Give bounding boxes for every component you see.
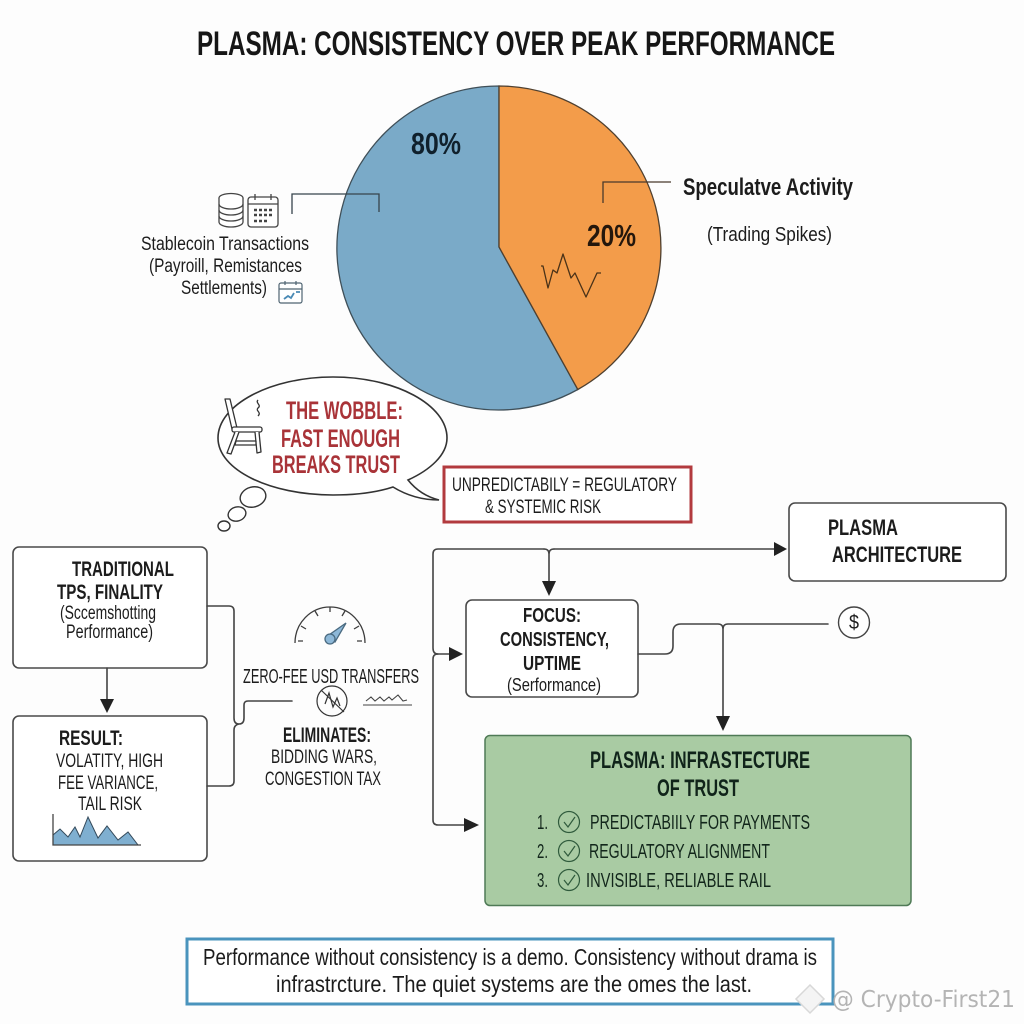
- icon: spike line: [541, 254, 601, 297]
- list item 2: 2.: [537, 841, 548, 863]
- text: stablecoin label: [141, 234, 309, 299]
- text: stablecoin label: Settlements): [181, 278, 267, 299]
- value: 80%: 80%: [411, 126, 461, 161]
- panel: result: TAIL RISK: [78, 794, 142, 815]
- speech bubble: the wobble: [218, 377, 447, 531]
- list item 1: [537, 812, 810, 834]
- text: wobble heading: FAST ENOUGH: [281, 425, 400, 453]
- list item 3: 3.: [537, 870, 548, 892]
- callout: regulatory risk: & SYSTEMIC RISK: [485, 497, 601, 518]
- bracket connector: [207, 606, 292, 786]
- panel: plasma architecture: ARCHITECTURE: [832, 542, 962, 567]
- panel: plasma infrastructure of trust: [485, 736, 911, 906]
- callout: regulatory risk: [444, 467, 691, 522]
- text: wobble heading: [272, 397, 403, 479]
- text: stablecoin label: (Payroill, Remistances: [149, 256, 302, 277]
- icon: dollar: [838, 607, 870, 638]
- callout: closing statement: Performance without consistency is a demo. Consistency without drama is: [203, 944, 817, 970]
- text: stablecoin label: Stablecoin Transactions: [141, 234, 309, 255]
- icon: wobbling chair: [225, 399, 262, 454]
- list item 3: INVISIBLE, RELIABLE RAIL: [586, 870, 771, 892]
- chart: volatility area: [53, 814, 141, 845]
- panel: traditional: TPS, FINALITY: [57, 581, 163, 604]
- text: wobble heading: BREAKS TRUST: [272, 451, 400, 479]
- panel: focus: [466, 600, 638, 697]
- text: wobble heading: THE WOBBLE:: [286, 397, 403, 425]
- list item 2: REGULATORY ALIGNMENT: [589, 841, 770, 863]
- label: stablecoin transactions: [141, 194, 379, 303]
- panel: result: FEE VARIANCE,: [58, 773, 158, 794]
- panel: focus: CONSISTENCY,: [500, 629, 609, 651]
- text: speculative heading: Speculatve Activity: [683, 174, 854, 201]
- icon: watermark logo: [796, 985, 824, 1013]
- panel: plasma infrastructure of trust: OF TRUST: [657, 775, 739, 802]
- value: 20%: 20%: [587, 218, 636, 253]
- panel: result: VOLATITY, HIGH: [56, 751, 163, 772]
- panel: traditional: (Sccemshotting: [60, 603, 156, 624]
- thought circles: [218, 484, 268, 531]
- leader line: stablecoin: [292, 194, 379, 214]
- panel: plasma architecture: [789, 503, 1006, 581]
- icon: flat wave: [363, 695, 412, 705]
- pie slice: speculative share: [499, 86, 661, 390]
- list item 1: PREDICTABIILY FOR PAYMENTS: [590, 812, 810, 834]
- label: speculative activity: [603, 174, 854, 246]
- panel: zero-fee transfers: CONGESTION TAX: [265, 769, 381, 790]
- panel: result: RESULT:: [59, 727, 123, 750]
- list item 1: 1.: [537, 812, 548, 834]
- text: watermark handle: @ Crypto-First21: [832, 987, 1015, 1013]
- panel: zero-fee transfers: BIDDING WARS,: [271, 747, 377, 768]
- list item 3: [537, 870, 771, 892]
- bubble outline: [218, 377, 447, 500]
- connector: focus to plasma trust: [638, 624, 828, 731]
- panel: result: [13, 716, 207, 861]
- list item 2: [537, 840, 770, 863]
- text: zero-fee heading: ZERO-FEE USD TRANSFERS: [243, 666, 419, 688]
- panel: traditional: TRADITIONAL: [72, 558, 174, 581]
- icon: no spikes: [317, 686, 347, 716]
- text: eliminates: ELIMINATES:: [283, 724, 371, 747]
- pie chart: [337, 86, 661, 410]
- panel: plasma infrastructure of trust: PLASMA: INFRASTECTURE: [590, 747, 810, 774]
- callout: closing statement: [187, 939, 833, 1004]
- panel: focus: (Serformance): [507, 675, 601, 695]
- panel: plasma architecture: PLASMA: [828, 515, 898, 540]
- text: speculative note: (Trading Spikes): [707, 224, 832, 246]
- icon: coin stack: [219, 194, 243, 227]
- panel: traditional: Performance): [66, 622, 153, 643]
- icon: calendar: [248, 194, 278, 227]
- pie slice: stablecoin share: [337, 86, 578, 410]
- icon: speed gauge: [295, 607, 365, 644]
- icon: small calendar chart: [279, 281, 302, 303]
- panel: focus: FOCUS:: [523, 605, 581, 627]
- callout: closing statement: infrastrcture. The quiet systems are the omes the last.: [276, 971, 752, 997]
- connectors: architecture flow: [433, 542, 787, 832]
- callout: regulatory risk: UNPREDICTABILY = REGULATORY: [452, 475, 677, 496]
- leader line: speculative: [603, 182, 671, 203]
- arrow: traditional to result: [100, 668, 114, 713]
- panel: focus: UPTIME: [523, 653, 581, 675]
- watermark: [796, 985, 1015, 1013]
- panel: traditional: [13, 547, 207, 668]
- icon: dollar: $: [849, 612, 859, 634]
- panel: zero-fee transfers: [243, 607, 419, 790]
